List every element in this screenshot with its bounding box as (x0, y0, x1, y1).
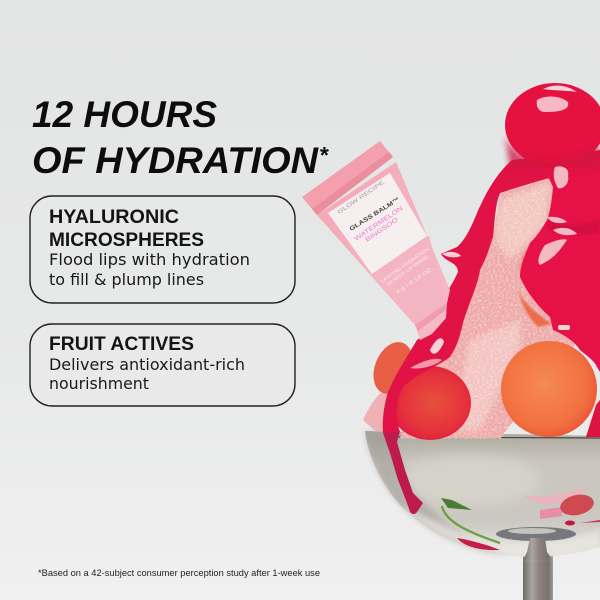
tube label (328, 173, 435, 296)
text: hyaluronic description (49, 250, 250, 289)
melon ball: orange right (501, 341, 597, 437)
text: hyaluronic description: to fill & plump lines (49, 270, 204, 289)
label text: GLOW RECIPE (337, 180, 386, 216)
tube fine print: GLASSY LIP DRINK (386, 253, 430, 287)
text: fruit actives description: Delivers antioxidant-rich (49, 355, 245, 374)
panel: fruit actives (30, 324, 295, 406)
shaved ice mound (363, 177, 580, 439)
reflection: pink fruit (523, 487, 600, 526)
syrup: right side (520, 150, 600, 372)
syrup: left band (383, 155, 553, 433)
heading: fruit actives: FRUIT ACTIVES (49, 333, 194, 355)
top cherry ball (505, 83, 600, 167)
tube body (317, 162, 450, 340)
text: hyaluronic description: Flood lips with hydration (49, 250, 250, 269)
tube fine print (380, 246, 435, 296)
icon: lip balm tube (302, 141, 450, 340)
melon ball: red front (389, 366, 471, 440)
melon ball: back left (366, 336, 420, 400)
title: OF HYDRATION (32, 140, 319, 181)
title (32, 94, 329, 181)
tube fine print: 4 g / 0.14 OZ. (395, 266, 435, 296)
syrup crevice shading (547, 220, 600, 235)
label text (337, 180, 405, 244)
tube cap (302, 141, 393, 215)
glossy highlights (537, 85, 577, 265)
heading: hyaluronic microspheres: MICROSPHERES (49, 229, 204, 251)
panel: hyaluronic microspheres (30, 196, 295, 303)
reflection: green leaf (441, 498, 500, 543)
heading: hyaluronic microspheres: HYALURONIC (49, 206, 179, 228)
small glints (410, 252, 570, 369)
label text: WATERMELON (353, 205, 405, 243)
icon: shaved ice and watermelon (363, 83, 600, 440)
footnote: *Based on a 42-subject consumer perception study after 1-week use (38, 568, 320, 579)
reflection: red streak (457, 538, 500, 550)
title: 12 HOURS (32, 94, 217, 135)
label text: BINGSOO (364, 217, 400, 244)
syrup drip (383, 431, 423, 514)
foot plate (496, 527, 576, 541)
label text: GLASS BALM™ (348, 196, 401, 233)
stem (523, 552, 553, 600)
text: fruit actives description: nourishment (49, 374, 149, 393)
heading: hyaluronic microspheres (49, 206, 204, 251)
title: * (319, 142, 329, 168)
tube fine print: LASTING HYDRATION (380, 246, 430, 284)
icon: steel bowl with stem (365, 431, 600, 600)
text: fruit actives description (49, 355, 245, 393)
